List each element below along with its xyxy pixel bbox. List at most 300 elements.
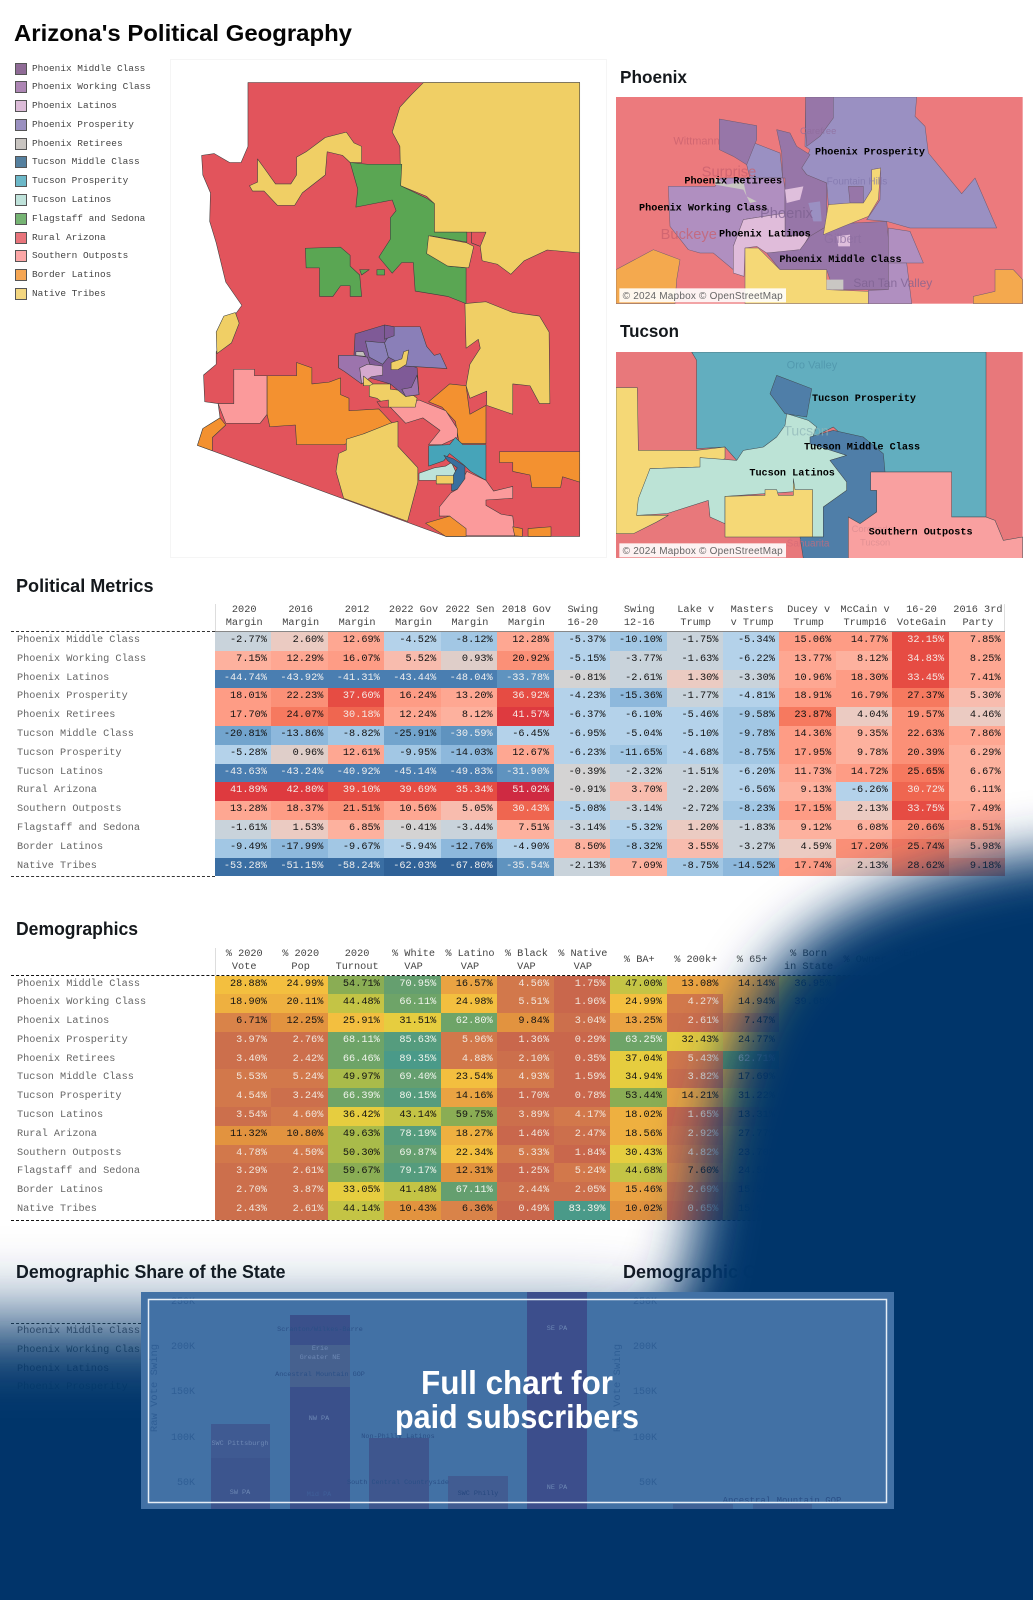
heatmap table: demographics: 37.04% — [625, 1053, 662, 1065]
table header: demographics: 2020 Turnout — [336, 948, 379, 973]
heatmap table: political metrics: -43.44% — [393, 672, 436, 684]
heatmap table: demographics: 24.98% — [456, 996, 493, 1008]
chart axes and labels: 250K — [171, 1297, 195, 1308]
heatmap table: political metrics: 8.25% — [970, 653, 1001, 665]
heatmap table: political metrics: -12.76% — [450, 841, 493, 853]
heatmap table: political metrics: 20.66% — [907, 822, 944, 834]
heading: Phoenix: Phoenix — [620, 67, 687, 87]
heatmap table: political metrics: -17.99% — [280, 841, 323, 853]
table header: demographics: % 200k+ — [674, 954, 717, 966]
heatmap table: political metrics: 14.36% — [794, 728, 831, 740]
heatmap table: demographics: 1.96% — [575, 996, 606, 1008]
heatmap table: political metrics: 10.56% — [399, 803, 436, 815]
heatmap table: demographics: 47.00% — [625, 978, 662, 990]
heatmap table: demographics: 7.47% — [744, 1015, 775, 1027]
heatmap table: demographics: 20.11% — [286, 996, 323, 1008]
heatmap table: political metrics: 4.46% — [970, 709, 1001, 721]
heatmap table: demographics: 63.25% — [625, 1034, 662, 1046]
map: Phoenix inset — [616, 97, 1023, 304]
map: Tucson inset: Oro Valley — [787, 359, 838, 371]
heatmap table: demographics: 0.49% — [518, 1203, 549, 1215]
row labels: political metrics: Tucson Prosperity — [17, 747, 122, 759]
heatmap table: political metrics: 13.28% — [230, 803, 267, 815]
table header: demographics: % Native VAP — [558, 948, 607, 973]
heatmap table: political metrics: -4.90% — [512, 841, 549, 853]
heatmap table: demographics: 7.60% — [688, 1165, 718, 1177]
heatmap table: demographics: 12.31% — [456, 1165, 493, 1177]
heatmap table: political metrics: -1.51% — [682, 766, 718, 778]
row labels: political metrics: Native Tribes — [17, 860, 97, 872]
legend: Phoenix Working Class — [32, 81, 151, 92]
heatmap table: political metrics: -5.32% — [625, 822, 662, 834]
heatmap table: political metrics: 36.92% — [512, 690, 549, 702]
heatmap table: political metrics: 20.39% — [907, 747, 944, 759]
heatmap table: political metrics: -2.61% — [625, 672, 662, 684]
heatmap table: political metrics: 12.28% — [512, 634, 549, 646]
heatmap table: demographics: 1.65% — [688, 1109, 718, 1121]
heatmap table: political metrics: 0.96% — [293, 747, 323, 759]
chart axes and labels: Mid PA — [307, 1491, 332, 1499]
heatmap table: political metrics: -2.72% — [682, 803, 718, 815]
heatmap table: political metrics: -0.81% — [569, 672, 606, 684]
heatmap table: political metrics: 1.30% — [688, 672, 718, 684]
heatmap table: political metrics: 6.67% — [970, 766, 1001, 778]
heatmap table: political metrics: -6.20% — [738, 766, 775, 778]
heatmap table: demographics: 10.43% — [399, 1203, 436, 1215]
heatmap table: demographics: 2.76% — [293, 1034, 323, 1046]
heatmap table: political metrics: -10.10% — [619, 634, 662, 646]
heading: Political Metrics: Political Metrics — [16, 576, 154, 596]
row labels: demographics: Southern Outposts — [17, 1147, 122, 1159]
row labels: demographics: Tucson Middle Class — [17, 1071, 134, 1083]
table header: political metrics: 2016 3rd Party — [953, 604, 1003, 629]
heatmap table: political metrics: -1.77% — [682, 690, 718, 702]
heatmap table: demographics: 4.17% — [575, 1109, 606, 1121]
heatmap table: demographics: 78.19% — [399, 1128, 436, 1140]
chart axes and labels: 50K — [639, 1478, 657, 1489]
map: Tucson inset: © 2024 Mapbox © OpenStreetMap — [623, 546, 783, 557]
heatmap table: political metrics: -9.78% — [738, 728, 775, 740]
heatmap table: demographics: 18.56% — [625, 1128, 662, 1140]
state map of Arizona regions — [197, 82, 580, 537]
heatmap table: political metrics: 9.78% — [857, 747, 888, 759]
heatmap table: demographics: 24.77% — [738, 1034, 775, 1046]
heatmap table: demographics: 2.42% — [293, 1053, 323, 1065]
heatmap table: demographics: 10.80% — [286, 1128, 323, 1140]
heatmap table: demographics: 36.42% — [343, 1109, 380, 1121]
heatmap table: demographics: 44.68% — [625, 1165, 662, 1177]
map: Phoenix inset: Phoenix — [760, 206, 814, 222]
heatmap table: demographics: 11.32% — [230, 1128, 267, 1140]
table header: demographics: % Born in State — [784, 948, 833, 973]
map: Tucson inset: Tucson Latinos — [749, 467, 835, 479]
legend: Phoenix Prosperity — [32, 119, 134, 130]
row labels: demographics: Phoenix Retirees — [17, 1053, 115, 1065]
heatmap table: political metrics: -6.22% — [738, 653, 775, 665]
heatmap table: political metrics: 30.72% — [907, 784, 944, 796]
row labels: demographics: Native Tribes — [17, 1203, 97, 1215]
chart axes and labels: Greater NE — [300, 1354, 340, 1362]
map: Tucson inset: Southern Outposts — [869, 526, 973, 538]
heatmap table: political metrics: 5.98% — [970, 841, 1001, 853]
heatmap table: political metrics: -6.26% — [851, 784, 888, 796]
heatmap table: political metrics: -4.52% — [399, 634, 436, 646]
heatmap table: demographics: 4.27% — [688, 996, 718, 1008]
legend: Tucson Latinos — [32, 194, 111, 205]
heatmap table: political metrics: 18.01% — [230, 690, 267, 702]
heatmap table: political metrics: -48.04% — [450, 672, 493, 684]
heatmap table: political metrics: 37.60% — [343, 690, 380, 702]
map: Phoenix inset: Buckeye — [661, 227, 717, 243]
heatmap table: demographics: 2.69% — [688, 1184, 718, 1196]
heatmap table: demographics: 2.92% — [688, 1128, 718, 1140]
heatmap table: political metrics: 22.63% — [907, 728, 944, 740]
heatmap table: political metrics: -6.10% — [625, 709, 662, 721]
heatmap table: political metrics: 42.80% — [286, 784, 323, 796]
heatmap table: political metrics: 12.29% — [286, 653, 323, 665]
row labels: demographics: Tucson Prosperity — [17, 1090, 122, 1102]
chart axes and labels: Non-Philly Latinos — [361, 1433, 435, 1441]
heatmap table: demographics: 32.43% — [682, 1034, 718, 1046]
chart bars — [211, 1292, 812, 1509]
heatmap table: demographics: 5.51% — [518, 996, 549, 1008]
heatmap table: demographics: 5.24% — [575, 1165, 606, 1177]
heatmap table: demographics: 0.35% — [575, 1053, 606, 1065]
heatmap table: demographics: 9.84% — [518, 1015, 549, 1027]
table header: political metrics: 2018 Gov Margin — [502, 604, 551, 629]
heatmap table: demographics: 39.68% — [794, 996, 831, 1008]
legend: Phoenix Latinos — [32, 100, 117, 111]
heatmap table: demographics: 2.61% — [293, 1203, 323, 1215]
heatmap table: demographics: 44.48% — [343, 996, 380, 1008]
heatmap table: demographics: 15.50% — [738, 1203, 775, 1215]
heatmap table: demographics: 28.88% — [230, 978, 267, 990]
heatmap table: political metrics: -5.94% — [399, 841, 436, 853]
heatmap table: political metrics: 13.20% — [456, 690, 493, 702]
heatmap table: political metrics: -0.39% — [569, 766, 606, 778]
heatmap table: political metrics: -6.56% — [738, 784, 775, 796]
chart axes and labels: Raw Vote Swing — [612, 1344, 624, 1432]
table header: political metrics: 2022 Gov Margin — [389, 604, 438, 629]
heatmap table: political metrics: -4.68% — [682, 747, 718, 759]
table header: demographics: % 65+ — [737, 954, 768, 966]
heatmap table: demographics: 43.14% — [399, 1109, 436, 1121]
heatmap table: demographics: 18.90% — [230, 996, 267, 1008]
heatmap table: political metrics: -43.92% — [280, 672, 323, 684]
heatmap table: political metrics: -3.77% — [625, 653, 662, 665]
heatmap table: demographics: 1.36% — [518, 1034, 549, 1046]
row labels: political metrics: Phoenix Working Class — [17, 653, 146, 665]
table header: political metrics: Lake v Trump — [677, 604, 714, 629]
heatmap table: political metrics: 34.83% — [907, 653, 944, 665]
table header: demographics: % BA+ — [624, 954, 655, 966]
heatmap table: political metrics: -8.75% — [738, 747, 775, 759]
heatmap table: demographics: 5.24% — [293, 1071, 323, 1083]
heatmap table: demographics: 0.65% — [688, 1203, 718, 1215]
heatmap table: political metrics: 6.08% — [857, 822, 888, 834]
heatmap table: political metrics: -43.24% — [280, 766, 323, 778]
heatmap table: political metrics: 5.52% — [405, 653, 436, 665]
heatmap table: demographics: 79.17% — [399, 1165, 436, 1177]
heatmap table: demographics: 89.35% — [399, 1053, 436, 1065]
panel: state map — [170, 59, 607, 558]
map: Tucson inset: Coronado — [852, 524, 893, 534]
heatmap table: demographics: 4.54% — [236, 1090, 267, 1102]
paywall message: Full chart for — [421, 1364, 613, 1401]
map: Phoenix inset: Phoenix Prosperity — [815, 147, 925, 159]
heatmap table: demographics: 83.39% — [569, 1203, 606, 1215]
heatmap table: demographics: 1.25% — [518, 1165, 549, 1177]
heatmap table: demographics: 5.96% — [462, 1034, 493, 1046]
heatmap table: political metrics: 30.18% — [343, 709, 380, 721]
heatmap table: political metrics: -44.74% — [224, 672, 267, 684]
heatmap table: political metrics: -3.14% — [625, 803, 662, 815]
heatmap table: demographics: 13.25% — [625, 1015, 662, 1027]
heatmap table: demographics: 10.02% — [625, 1203, 662, 1215]
heatmap table: political metrics: 12.61% — [343, 747, 380, 759]
row labels: political metrics: Phoenix Retirees — [17, 709, 115, 721]
heatmap table: demographics: 6.71% — [236, 1015, 267, 1027]
paywall message: paid subscribers — [395, 1398, 639, 1435]
table header: political metrics: 2016 Margin — [282, 604, 319, 629]
row labels: political metrics: Tucson Middle Class — [17, 728, 134, 740]
heatmap table: demographics: 4.56% — [518, 978, 549, 990]
heatmap table: political metrics: 8.12% — [462, 709, 493, 721]
chart axes and labels — [149, 1297, 841, 1506]
heatmap table: political metrics: 18.37% — [286, 803, 323, 815]
heatmap table: political metrics: 23.87% — [794, 709, 831, 721]
heatmap table: demographics: 31.22% — [738, 1090, 775, 1102]
heatmap table: demographics: 5.53% — [236, 1071, 267, 1083]
heatmap table: political metrics: -3.14% — [569, 822, 606, 834]
chart axes and labels: 100K — [633, 1433, 657, 1444]
heatmap table: political metrics: 33.45% — [907, 672, 944, 684]
heatmap table: political metrics: 16.24% — [399, 690, 436, 702]
heatmap table: political metrics: 7.09% — [631, 860, 662, 872]
table header: political metrics: 2022 Sen Margin — [445, 604, 495, 629]
heatmap table: political metrics: 6.85% — [349, 822, 380, 834]
heatmap table: political metrics: 20.92% — [512, 653, 549, 665]
table header: political metrics: McCain v Trump16 — [840, 604, 890, 629]
map: Phoenix inset: Phoenix Middle Class — [779, 254, 902, 266]
table header: demographics: % Black VAP — [505, 948, 548, 973]
table header: demographics: % 2020 Pop — [282, 948, 319, 973]
heatmap table: political metrics: 9.35% — [857, 728, 888, 740]
heatmap table: demographics: 22.34% — [456, 1147, 493, 1159]
heatmap table: demographics: 3.87% — [293, 1184, 323, 1196]
heatmap table: political metrics: -9.95% — [399, 747, 436, 759]
chart axes and labels: 150K — [171, 1387, 195, 1398]
heatmap table: political metrics — [215, 632, 1005, 876]
row labels: political metrics: Phoenix Prosperity — [17, 690, 128, 702]
heatmap table: political metrics: 7.41% — [970, 672, 1001, 684]
heatmap table: political metrics: 17.20% — [851, 841, 888, 853]
heatmap table: political metrics: 1.53% — [293, 822, 323, 834]
heatmap table: demographics: 1.46% — [518, 1128, 549, 1140]
heatmap table: demographics: 3.54% — [236, 1109, 267, 1121]
paywall panel with blurred chart — [141, 1292, 894, 1509]
heatmap table: demographics: 33.05% — [343, 1184, 380, 1196]
heatmap table: political metrics: 2.13% — [857, 860, 888, 872]
heatmap table: political metrics: 5.30% — [970, 690, 1001, 702]
chart axes and labels: 150K — [633, 1387, 657, 1398]
row labels: demographics: Phoenix Latinos — [17, 1015, 109, 1027]
heatmap table: demographics: 2.10% — [518, 1053, 549, 1065]
heading: Demographics: Demographics — [16, 919, 138, 939]
heatmap table: political metrics: -14.52% — [732, 860, 775, 872]
row labels: political metrics: Border Latinos — [17, 841, 103, 853]
heatmap table: demographics: 67.11% — [456, 1184, 493, 1196]
heatmap table: demographics: 3.24% — [293, 1090, 323, 1102]
heatmap table: demographics: 4.82% — [688, 1147, 718, 1159]
table header: political metrics — [215, 604, 1005, 630]
heatmap table: demographics: 14.21% — [682, 1090, 718, 1102]
heatmap table: political metrics: -4.81% — [738, 690, 775, 702]
heatmap table: political metrics: -5.08% — [569, 803, 606, 815]
heatmap table: demographics: 17.69% — [738, 1071, 775, 1083]
table header: political metrics: 2012 Margin — [339, 604, 376, 629]
heatmap table: demographics: 59.67% — [343, 1165, 380, 1177]
heatmap table: political metrics: 2.13% — [857, 803, 888, 815]
heatmap table: political metrics: 2.60% — [293, 634, 323, 646]
heatmap table: political metrics: 7.49% — [970, 803, 1001, 815]
row labels: political metrics: Phoenix Middle Class — [17, 634, 140, 646]
row labels: political metrics — [17, 634, 146, 872]
heatmap table: political metrics: 17.70% — [230, 709, 267, 721]
chart axes and labels: 200K — [171, 1342, 195, 1353]
heatmap table: demographics: 15.46% — [625, 1184, 662, 1196]
chart axes and labels: 250K — [633, 1297, 657, 1308]
heatmap table: political metrics: -8.82% — [343, 728, 380, 740]
white inner frame — [148, 1300, 886, 1502]
heatmap table: political metrics: -11.65% — [619, 747, 662, 759]
legend: Tucson Prosperity — [32, 175, 128, 186]
heatmap table: political metrics: -1.63% — [682, 653, 718, 665]
heatmap table: political metrics: -67.80% — [450, 860, 493, 872]
heatmap table: demographics: 5.43% — [688, 1053, 718, 1065]
heatmap table: demographics: 44.14% — [343, 1203, 380, 1215]
heatmap table: political metrics: -30.59% — [450, 728, 493, 740]
heatmap table: political metrics: -1.75% — [682, 634, 718, 646]
heatmap table: political metrics: -1.83% — [738, 822, 775, 834]
chart axes and labels: SWC Pittsburgh — [211, 1440, 269, 1448]
heatmap table: political metrics: 17.15% — [794, 803, 831, 815]
heatmap table: demographics: 36.95% — [794, 978, 831, 990]
heatmap table: political metrics: -41.31% — [337, 672, 380, 684]
heatmap table: demographics: 4.88% — [462, 1053, 493, 1065]
heatmap table: political metrics: -49.83% — [450, 766, 493, 778]
heatmap table: political metrics: -2.20% — [682, 784, 718, 796]
legend: Native Tribes — [32, 288, 106, 299]
chart axes and labels: SWC Philly — [458, 1490, 498, 1498]
heatmap table: political metrics: 16.07% — [343, 653, 380, 665]
heatmap table: political metrics: 25.65% — [907, 766, 944, 778]
heatmap table: political metrics: -3.30% — [738, 672, 775, 684]
heatmap table: demographics: 27.77% — [738, 1128, 775, 1140]
heatmap table: demographics: 1.75% — [575, 978, 606, 990]
heatmap table: political metrics: 30.43% — [512, 803, 549, 815]
heatmap table: demographics: 2.05% — [575, 1184, 606, 1196]
map: Phoenix inset: Phoenix Working Class — [639, 202, 767, 214]
heatmap table: demographics: 50.30% — [343, 1147, 380, 1159]
table header: political metrics: Swing 12-16 — [624, 604, 655, 629]
heatmap table: political metrics: -13.86% — [280, 728, 323, 740]
heatmap table: demographics: 31.51% — [399, 1015, 436, 1027]
map: Tucson inset — [616, 352, 1023, 558]
heatmap table: political metrics: 12.69% — [343, 634, 380, 646]
heatmap table: political metrics: 16.79% — [851, 690, 888, 702]
heatmap table: demographics: 49.63% — [343, 1128, 380, 1140]
heatmap table: demographics: 24.55% — [738, 1165, 775, 1177]
map: Phoenix inset: © 2024 Mapbox © OpenStreetMap — [623, 291, 783, 302]
heatmap table: political metrics: -51.15% — [280, 860, 323, 872]
heatmap table: political metrics: -45.14% — [393, 766, 436, 778]
legend: Southern Outposts — [32, 250, 128, 261]
heatmap table: demographics: 68.11% — [343, 1034, 380, 1046]
heatmap table: political metrics: 19.57% — [907, 709, 944, 721]
legend: Border Latinos — [32, 269, 111, 280]
chart axes and labels: SE PA — [547, 1325, 568, 1333]
heatmap table: demographics: 1.84% — [575, 1147, 606, 1159]
row labels: demographics: Border Latinos — [17, 1184, 103, 1196]
row labels: demographic share: Phoenix Prosperity — [17, 1381, 128, 1393]
heatmap table: political metrics: -53.28% — [224, 860, 267, 872]
row labels: demographics: Phoenix Working Class — [17, 996, 146, 1008]
heatmap table: demographics: 16.57% — [456, 978, 493, 990]
map: Phoenix inset: Surprise — [702, 164, 756, 180]
heatmap table: demographics: 2.61% — [293, 1165, 323, 1177]
heatmap table: political metrics: -6.23% — [569, 747, 606, 759]
table header: political metrics: 2020 Margin — [226, 604, 263, 629]
chart axes and labels: Ancestral Mountain GOP — [723, 1496, 841, 1506]
table header: demographics: % Owner — [844, 954, 887, 966]
heatmap table: demographics: 85.63% — [399, 1034, 436, 1046]
map: Phoenix inset: Gilbert — [824, 232, 862, 246]
heatmap table: political metrics: -9.67% — [343, 841, 380, 853]
heatmap table: demographics: 13.08% — [682, 978, 718, 990]
chart axes and labels: 200K — [633, 1342, 657, 1353]
heatmap table: political metrics: 41.57% — [512, 709, 549, 721]
legend: Rural Arizona — [32, 232, 106, 243]
heatmap table: demographics: 1.70% — [518, 1090, 549, 1102]
heatmap table: demographics: 18.27% — [456, 1128, 493, 1140]
heatmap table: demographics: 80.15% — [399, 1090, 436, 1102]
row labels: demographics: Phoenix Prosperity — [17, 1034, 128, 1046]
heatmap table: political metrics: -15.36% — [619, 690, 662, 702]
table header: political metrics: Swing 16-20 — [567, 604, 598, 629]
heatmap table: political metrics: 39.69% — [399, 784, 436, 796]
heatmap table: political metrics: -5.34% — [738, 634, 775, 646]
chart axes and labels: Erie — [312, 1345, 328, 1353]
heatmap table: political metrics: -6.45% — [512, 728, 549, 740]
heatmap table: demographics: 23.70% — [738, 1147, 775, 1159]
heatmap table: demographics: 4.93% — [518, 1071, 549, 1083]
row labels: demographic share: Phoenix Latinos — [17, 1363, 109, 1375]
heatmap table: demographics: 14.16% — [456, 1090, 493, 1102]
heading: Tucson: Tucson — [620, 321, 679, 341]
table header: political metrics: Ducey v Trump — [787, 604, 830, 629]
heatmap table: demographics: 30.43% — [625, 1147, 662, 1159]
heatmap table: political metrics: 4.04% — [857, 709, 888, 721]
heatmap table: political metrics: 7.51% — [518, 822, 549, 834]
heatmap table: political metrics: 15.06% — [794, 634, 831, 646]
heatmap table: political metrics: 41.89% — [230, 784, 267, 796]
heatmap table: political metrics: -5.28% — [230, 747, 267, 759]
heatmap table: political metrics: -5.37% — [569, 634, 606, 646]
heatmap table: political metrics: 25.74% — [907, 841, 944, 853]
heatmap table: demographics: 6.36% — [462, 1203, 493, 1215]
heatmap table: political metrics: 18.91% — [794, 690, 831, 702]
